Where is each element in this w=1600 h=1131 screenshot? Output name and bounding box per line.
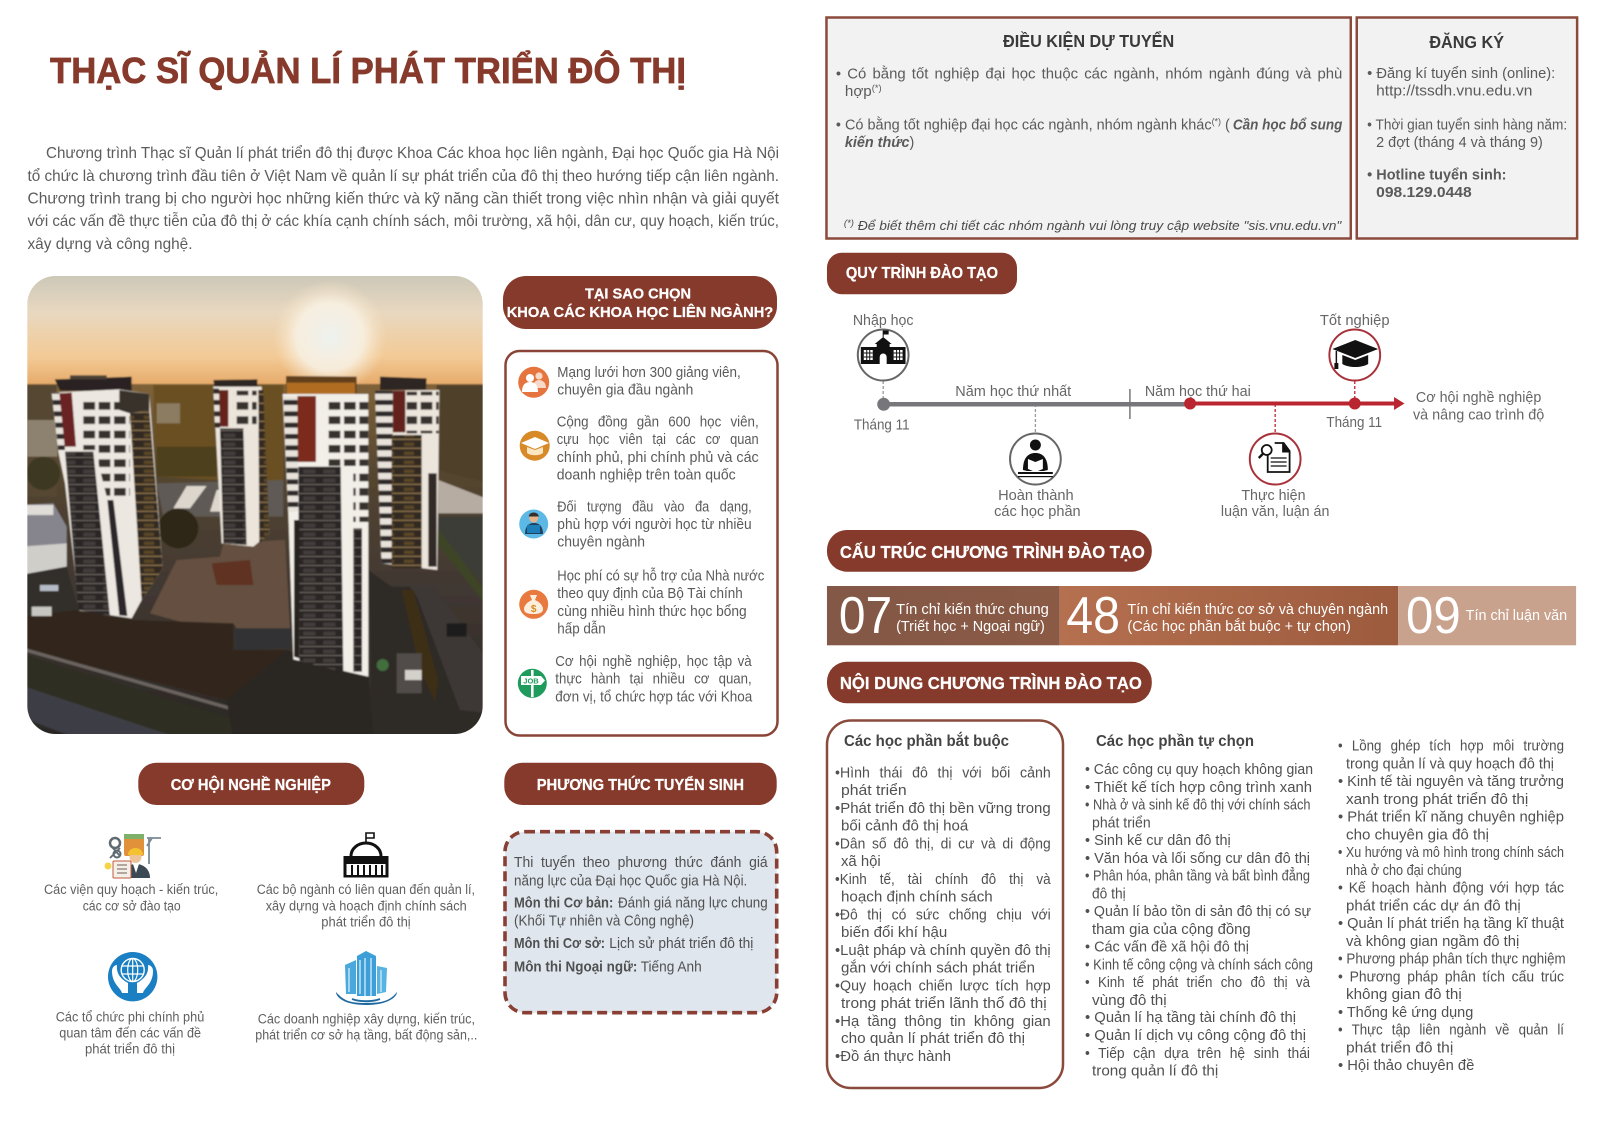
icon: job signpost: [518, 669, 547, 698]
icon: money bag: $: [531, 604, 537, 615]
text block: elective modules column 2: [1338, 739, 1566, 1074]
panel: compulsory modules: Các học phần bắt buộc: [844, 731, 1009, 750]
panel: admission requirements: Cần học bổ sung: [1233, 117, 1342, 134]
text block: elective modules column 2: • Lồng ghép tích hợp môi trường: [1338, 739, 1564, 755]
text block: elective modules column 2: phát triển các dự án đô thị: [1346, 898, 1521, 914]
text block: elective modules column 2: • Xu hướng và mô hình trong chính sách: [1338, 845, 1564, 861]
icon: learner at laptop: [519, 510, 548, 538]
panel: registration: http://tssdh.vnu.edu.vn: [1376, 83, 1532, 100]
text block: elective modules column 2: • Hội thảo chuyên đề: [1338, 1058, 1474, 1074]
text: companies: [255, 1012, 477, 1043]
panel: compulsory modules: •Hình thái đô thị với bối cảnh: [835, 765, 1051, 781]
heading: training process: QUY TRÌNH ĐÀO TẠO: [846, 265, 998, 282]
heading: why choose: KHOA CÁC KHOA HỌC LIÊN NGÀNH?: [507, 303, 773, 321]
panel: admission requirements: hợp: [845, 84, 870, 100]
panel: admission requirements: (*): [1212, 116, 1221, 127]
text block: elective modules column 2: nhà ở cho đại chúng: [1346, 863, 1462, 879]
text block: elective modules column 1: • Quản lí dịch vụ công cộng đô thị: [1085, 1028, 1306, 1044]
text block: elective modules column 2: không gian đô thị: [1346, 987, 1462, 1003]
text block: elective modules column 1: • Sinh kế cư dân đô thị: [1085, 833, 1231, 849]
text: diverse learners: chuyên ngành: [557, 535, 645, 551]
panel: admission method details: năng lực của Đại học Quốc gia Hà Nội.: [514, 873, 747, 889]
text: tuition: hấp dẫn: [557, 621, 606, 638]
panel: admission method details: [505, 832, 777, 1013]
panel: compulsory modules: phát triển: [841, 783, 907, 799]
panel: admission method details: Môn thi Ngoại ngữ:: [514, 960, 637, 976]
text block: elective modules column 1: tham gia của cộng đồng: [1092, 922, 1251, 938]
photo: apartment towers at sunset: [20, 270, 490, 741]
text block: elective modules column 1: • Quản lí hạ tầng tài chính đô thị: [1085, 1010, 1296, 1026]
panel: admission requirements: kiến thức: [845, 135, 910, 151]
text block: elective modules column 2: • Phương pháp phân tích thực nghiệm: [1338, 952, 1566, 968]
panel: compulsory modules: •Dân số đô thị, di cư và di động: [835, 836, 1051, 852]
icon: engineer and planning: [104, 834, 161, 878]
segment: 07 credits: 07: [839, 586, 892, 644]
icon: buildings: [336, 951, 397, 1005]
text: ministries: [257, 882, 475, 930]
text block: elective modules column 2: xanh trong phát triển đô thị: [1346, 792, 1528, 808]
segment: 48 credits: Tín chỉ kiến thức cơ sở và chuyên ngành: [1127, 601, 1388, 618]
timeline: Thực hiện: [1241, 487, 1306, 504]
text block: elective modules column 2: • Kinh tế tài nguyên và tăng trưởng: [1338, 774, 1564, 790]
panel: compulsory modules: •Kinh tế, tài chính đô thị và: [835, 872, 1052, 888]
panel: registration: ĐĂNG KÝ: [1429, 31, 1504, 52]
text: community: Cộng đồng gần 600 học viên,: [557, 414, 759, 430]
intro paragraph: tổ chức là chương trình đầu tiên ở Việt Nam về quản lí sự phát triển của đô thị theo hướng tiếp cận liên ngành.: [28, 167, 779, 185]
text block: elective modules column 1: • Thiết kế tích hợp công trình xanh: [1085, 780, 1312, 796]
panel: admission method details: Thi tuyển theo phương thức đánh giá: [514, 855, 769, 871]
timeline: Năm học thứ nhất: [955, 383, 1072, 400]
text block: elective modules column 1: • Kinh tế phát triển cho đô thị và: [1085, 975, 1311, 991]
segment: 09 credits: 09: [1406, 586, 1461, 644]
panel: admission requirements: Để biết thêm chi tiết các nhóm ngành vui lòng truy cập website "sis.vnu.edu.vn": [854, 218, 1343, 233]
text: diverse learners: phù hợp với người học từ nhiều: [557, 517, 752, 533]
panel: compulsory modules: biến đổi khí hậu: [841, 925, 947, 941]
text block: elective modules column 1: • Nhà ở và sinh kế đô thị với chính sách: [1085, 798, 1310, 814]
text block: elective modules column 1: • Văn hóa và lối sống cư dân đô thị: [1085, 851, 1310, 867]
text: diverse learners: [557, 500, 752, 551]
icon: money bag: [519, 590, 548, 619]
icon: government building: [344, 833, 388, 878]
timeline: Cơ hội nghề nghiệp: [1416, 389, 1541, 406]
segment: 07 credits: Tín chỉ kiến thức chung: [896, 601, 1049, 618]
panel: compulsory modules: hoạch định chính sách: [841, 890, 993, 906]
text: ministries: xây dựng và hoạch định chính sách: [266, 898, 467, 914]
icon: globe in hands: [108, 952, 157, 1001]
heading: training process: [827, 253, 1017, 294]
title: THẠC SĨ QUẢN LÍ PHÁT TRIỂN ĐÔ THỊ: [50, 49, 686, 91]
text block: elective modules column 2: • Thống kê ứng dụng: [1338, 1005, 1473, 1021]
panel: compulsory modules: •Đồ án thực hành: [835, 1049, 951, 1065]
panel: admission method details: Môn thi Cơ sở:: [514, 936, 605, 952]
text: ministries: Các bộ ngành có liên quan đến quản lí,: [257, 882, 475, 897]
text: community: [557, 414, 759, 484]
panel: compulsory modules: [827, 720, 1063, 1088]
text: NGOs: quan tâm đến các vấn đề: [59, 1026, 201, 1041]
text: planning institutes: Các viện quy hoạch - kiến trúc,: [44, 882, 218, 897]
timeline: Năm học thứ hai: [1145, 383, 1251, 400]
panel: compulsory modules: xã hội: [841, 854, 881, 870]
segment: 48 credits: (Các học phần bắt buộc + tự chọn): [1127, 618, 1351, 635]
text: companies: phát triển cơ sở hạ tầng, bất động sản,..: [255, 1028, 477, 1043]
segment: 48 credits: [1060, 586, 1398, 645]
segment: 07 credits: [827, 586, 1060, 645]
text: tuition: theo quy định của Bộ Tài chính: [557, 586, 743, 602]
icon: document with magnifier: [1250, 434, 1301, 484]
text: opportunities: Cơ hội nghề nghiệp, học tập và: [555, 654, 753, 670]
heading: admission method: PHƯƠNG THỨC TUYỂN SINH: [537, 775, 744, 794]
panel: admission requirements: (*): [844, 218, 854, 228]
text: tuition: Học phí có sự hỗ trợ của Nhà nước: [557, 568, 764, 584]
panel: registration: [1357, 18, 1577, 238]
text block: elective modules column 1: phát triển: [1092, 815, 1151, 831]
text block: elective modules column 1: • Tiếp cận dựa trên hệ sinh thái: [1085, 1046, 1310, 1062]
text block: elective modules column 2: • Phát triển kĩ năng chuyên nghiệp: [1338, 810, 1564, 826]
text block: elective modules column 1: trong quản lí đô thị: [1092, 1064, 1218, 1080]
heading: admission method: [504, 763, 777, 805]
text block: elective modules column 2: cho chuyên gia đô thị: [1346, 828, 1489, 844]
panel: admission requirements: (: [1221, 117, 1230, 134]
panel: compulsory modules: cho quản lí phát triển đô thị: [841, 1031, 1025, 1047]
text block: elective modules column 2: • Quản lí phát triển hạ tầng kĩ thuật: [1338, 916, 1564, 932]
intro paragraph: với các vấn đề thực tiễn của đô thị ở các khía cạnh chính sách, môi trường, xã hội, dân cư, quy hoạch, kiến trúc,: [28, 211, 779, 230]
timeline: [853, 312, 1544, 520]
timeline: Tháng 11: [854, 416, 910, 434]
panel: compulsory modules: •Quy hoạch chiến lược tích hợp: [835, 978, 1051, 994]
heading: career opportunities: CƠ HỘI NGHỀ NGHIỆP: [171, 775, 331, 794]
text: diverse learners: Đối tượng đầu vào đa dạng,: [557, 500, 752, 516]
text block: elective modules column 1: vùng đô thị: [1092, 993, 1167, 1009]
segment: 09 credits: [1398, 586, 1576, 645]
panel: admission requirements: • Có bằng tốt nghiệp đại học các ngành, nhóm ngành khác: [836, 117, 1210, 134]
panel: compulsory modules: •Hạ tầng thông tin không gian: [835, 1014, 1051, 1030]
panel: admission method details: Đánh giá năng lực chung: [618, 896, 768, 912]
text: tuition: [557, 568, 764, 638]
panel: admission method details: Môn thi Cơ bản:: [514, 896, 613, 912]
credit bar: [827, 586, 1576, 645]
panel: compulsory modules: •Đô thị có sức chống chịu với: [835, 907, 1051, 923]
panel: admission requirements: ): [910, 135, 914, 151]
panel: compulsory modules: trong phát triển lãnh thổ đô thị: [841, 996, 1047, 1012]
text block: elective modules column 2: • Thực tập liên ngành về quản lí: [1338, 1022, 1564, 1038]
panel: admission method details: (Khối Tự nhiên và Công nghệ): [514, 913, 694, 929]
text: opportunities: [555, 654, 753, 706]
text block: elective modules column 1: • Kinh tế công cộng và chính sách công: [1085, 957, 1313, 973]
panel: registration: • Thời gian tuyển sinh hàng năm:: [1367, 117, 1567, 134]
text: NGOs: phát triển đô thị: [85, 1042, 175, 1057]
text block: elective modules column 2: • Phương pháp phân tích cấu trúc: [1338, 970, 1564, 986]
segment: 09 credits: Tín chỉ luận văn: [1466, 607, 1567, 624]
text: lecturers: Mạng lưới hơn 300 giảng viên,: [557, 365, 741, 381]
text block: elective modules column 1: • Các công cụ quy hoạch không gian: [1085, 762, 1313, 778]
text: planning institutes: [44, 882, 218, 914]
text block: elective modules column 2: và không gian ngầm đô thị: [1346, 934, 1519, 950]
timeline: Nhập học: [853, 312, 914, 329]
intro paragraph: Chương trình trang bị cho người học những kiến thức và kỹ năng cần thiết trong việc nhìn nhận và giải quyết: [28, 190, 780, 208]
text: community: doanh nghiệp trên toàn quốc: [557, 468, 736, 484]
text block: elective modules column 1: • Quản lí bảo tồn di sản đô thị có sự: [1085, 904, 1311, 920]
timeline: và nâng cao trình độ: [1413, 406, 1544, 424]
segment: 48 credits: 48: [1066, 586, 1120, 644]
text: lecturers: [557, 365, 741, 399]
text: lecturers: chuyên gia đầu ngành: [557, 383, 693, 399]
panel: admission requirements: (*): [872, 83, 882, 93]
text block: elective modules column 2: phát triển đô thị: [1346, 1040, 1453, 1056]
panel: admission method details: Lịch sử phát triển đô thị: [609, 936, 753, 952]
text block: elective modules column 1: Các học phần tự chọn: [1096, 733, 1254, 750]
segment: 07 credits: (Triết học + Ngoại ngữ): [896, 618, 1045, 635]
timeline: các học phần: [994, 503, 1081, 520]
panel: compulsory modules: •Luật pháp và chính quyền đô thị: [835, 943, 1051, 959]
icon: graduation cap: [520, 431, 550, 461]
text: community: chính phủ, phi chính phủ và các: [557, 450, 759, 466]
icon: person reading: [1010, 434, 1061, 484]
text block: elective modules column 1: đô thị: [1092, 886, 1126, 902]
panel: compulsory modules: •Phát triển đô thị bền vững trong: [835, 801, 1051, 817]
panel: admission requirements: [826, 18, 1351, 238]
text: NGOs: Các tổ chức phi chính phủ: [56, 1010, 204, 1024]
text block: elective modules column 2: trong quản lí và quy hoạch đô thị: [1346, 756, 1554, 772]
timeline: luận văn, luận án: [1221, 503, 1329, 520]
text: opportunities: thực hành tại nhiều cơ quan,: [555, 672, 752, 688]
panel: registration: 2 đợt (tháng 4 và tháng 9): [1376, 135, 1543, 151]
timeline: Tốt nghiệp: [1320, 312, 1390, 329]
panel: registration: • Đăng kí tuyển sinh (online):: [1367, 66, 1555, 82]
intro paragraph: Chương trình Thạc sĩ Quản lí phát triển đô thị được Khoa Các khoa học liên ngành, Đại học Quốc gia Hà Nội: [46, 144, 779, 162]
panel: admission requirements: • Có bằng tốt nghiệp đại học thuộc các ngành, nhóm ngành đúng và phù: [836, 65, 1342, 83]
text block: elective modules column 1: • Các vấn đề xã hội đô thị: [1085, 940, 1249, 956]
heading: why choose: [503, 276, 777, 329]
panel: admission requirements: ĐIỀU KIỆN DỰ TUYỂN: [1003, 30, 1174, 51]
icon: people: [518, 367, 549, 398]
text block: elective modules column 1: • Phân hóa, phân tầng và bất bình đẳng: [1085, 866, 1310, 884]
heading: career opportunities: [138, 763, 364, 805]
panel: compulsory modules: bối cảnh đô thị hoá: [841, 818, 969, 834]
timeline: Tháng 11: [1326, 414, 1382, 431]
text: community: cựu học viên tại các cơ quan: [557, 432, 759, 448]
panel: compulsory modules: gắn với chính sách phát triển: [841, 960, 1035, 976]
icon: school building: [858, 330, 909, 380]
text: planning institutes: các cơ sở đào tạo: [83, 898, 181, 914]
text block: elective modules column 2: • Kế hoạch hành động với hợp tác: [1338, 881, 1564, 897]
intro paragraph: xây dựng và công nghệ.: [28, 236, 192, 253]
heading: program content: [827, 662, 1152, 703]
text: tuition: cùng nhiều hình thức học bổng: [557, 604, 747, 620]
intro paragraph: [28, 144, 780, 253]
text block: elective modules column 1: [1085, 733, 1313, 1080]
panel: why choose reasons: [506, 351, 778, 736]
text: NGOs: [56, 1010, 204, 1057]
panel: registration: 098.129.0448: [1376, 185, 1472, 201]
icon: job signpost: JOB: [523, 676, 539, 686]
panel: admission method details: Tiếng Anh: [641, 960, 702, 976]
heading: why choose: TẠI SAO CHỌN: [585, 286, 691, 302]
text: opportunities: đơn vị, tổ chức hợp tác với Khoa: [555, 690, 753, 706]
text: companies: Các doanh nghiệp xây dựng, kiến trúc,: [258, 1012, 475, 1026]
icon: graduation cap: [1329, 330, 1380, 380]
timeline: Hoàn thành: [998, 487, 1074, 504]
text: ministries: phát triển đô thị: [321, 915, 411, 930]
panel: registration: • Hotline tuyển sinh:: [1367, 167, 1506, 184]
heading: program content: NỘI DUNG CHƯƠNG TRÌNH ĐÀO TẠO: [840, 672, 1142, 693]
panel: career items: [44, 833, 477, 1057]
heading: program structure: CẤU TRÚC CHƯƠNG TRÌNH ĐÀO TẠO: [840, 541, 1145, 562]
heading: program structure: [827, 530, 1152, 572]
